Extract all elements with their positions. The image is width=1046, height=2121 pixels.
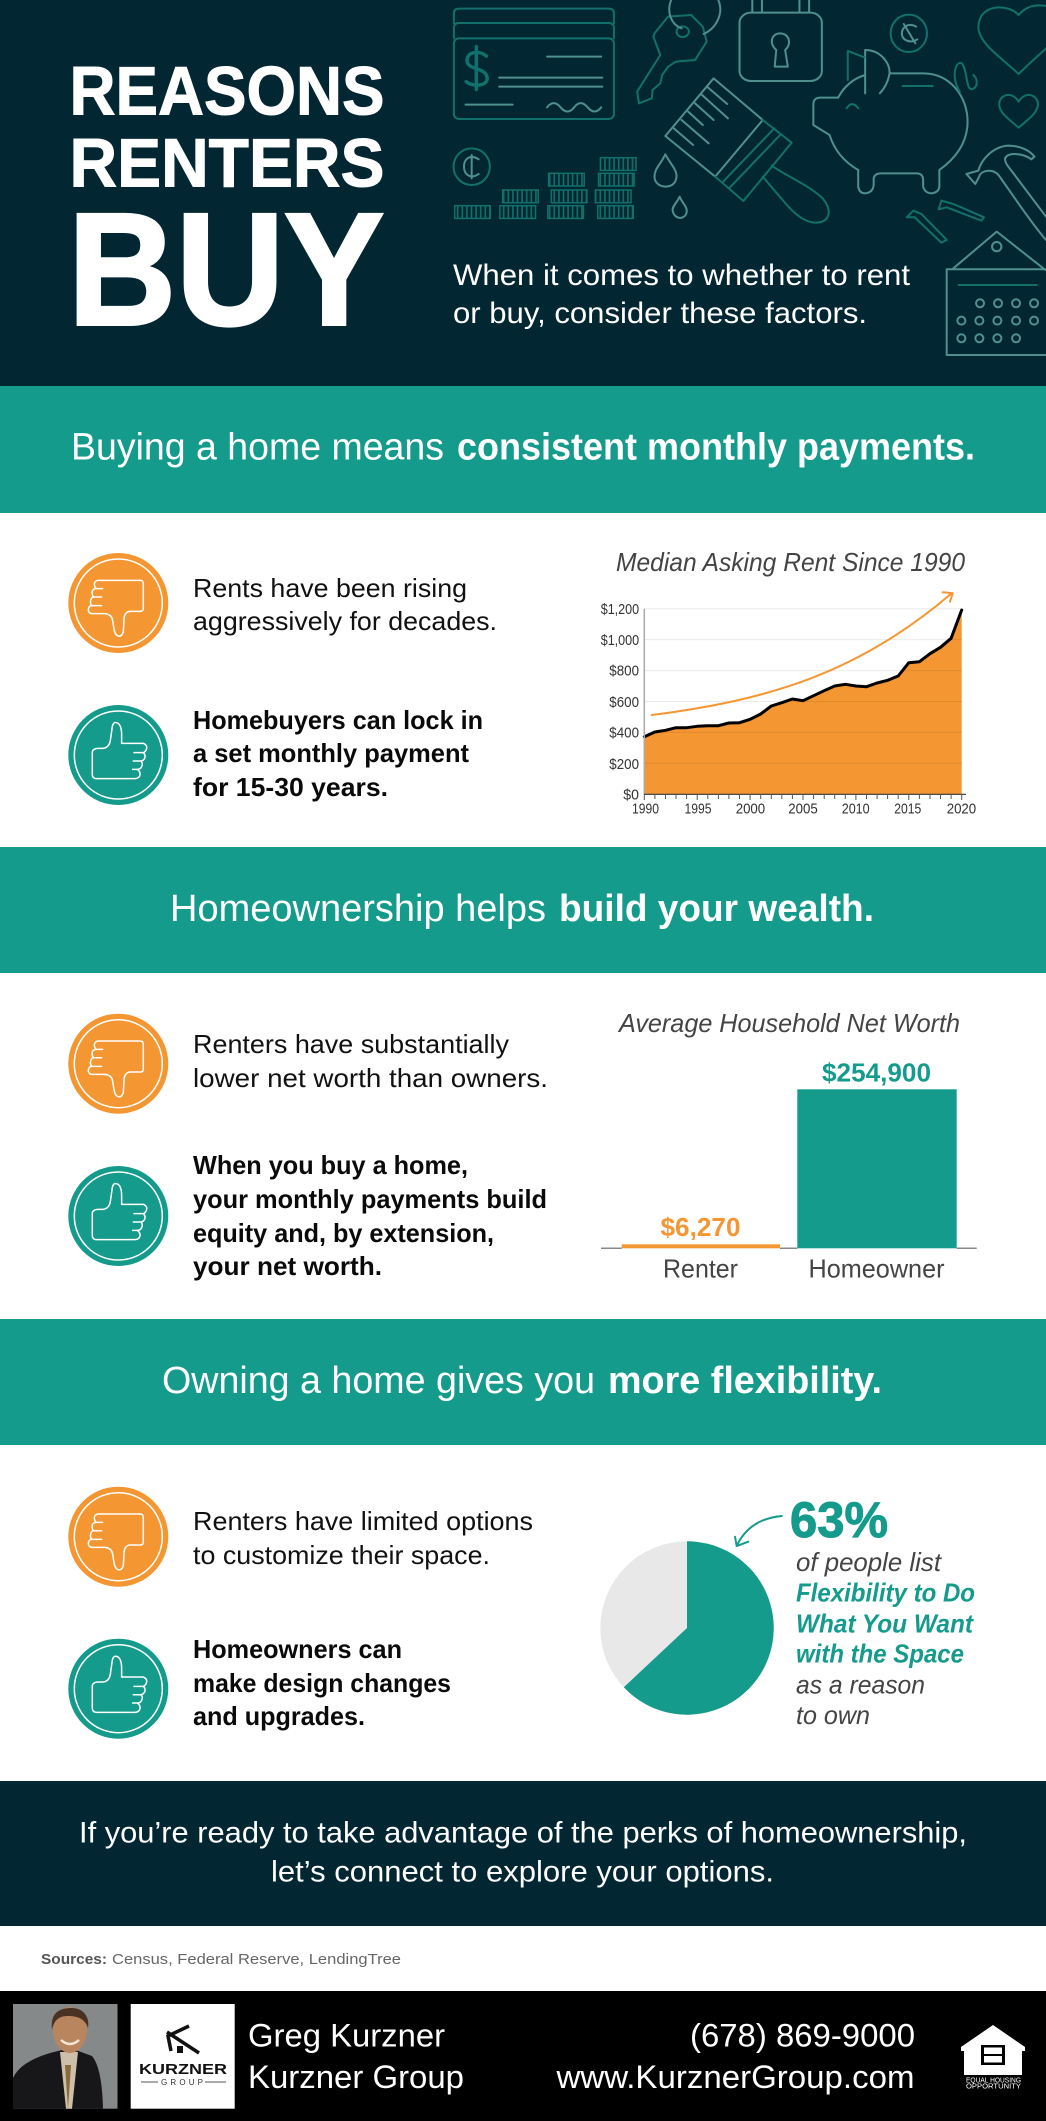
agent contact: (678) 869-9000 (690, 2018, 915, 2054)
icon: key (637, 0, 720, 103)
icon: equal housing opportunity (961, 2025, 1025, 2090)
x axis labels: 2005 (788, 800, 818, 818)
panel: call to action (0, 1781, 1046, 1926)
x axis labels: 2010 (842, 800, 870, 818)
x axis labels: 2020 (947, 800, 976, 818)
text: payments build equity: equity and, by extension, (193, 1218, 494, 1248)
title: REASONS (70, 52, 384, 130)
y axis labels (601, 601, 639, 804)
text: renters limited options: Renters have limited options (193, 1506, 533, 1536)
icon: calendar house (947, 232, 1045, 355)
icon: thumbs down 2 (68, 1014, 168, 1114)
arrow: rising rent trend (652, 592, 953, 715)
text: renters limited options (193, 1506, 533, 1570)
icon: thumbs down 1 (68, 553, 168, 653)
text: renters lower net worth: lower net worth than owners. (193, 1063, 548, 1093)
icon: thumbs up 3 (68, 1639, 168, 1739)
bar chart: net worth: Renter (663, 1253, 738, 1283)
text: renters lower net worth (193, 1029, 548, 1093)
icon: thumbs down 3 (68, 1487, 168, 1587)
company logo (131, 2004, 235, 2109)
callout: 63 percent stat: What You Want (796, 1608, 974, 1638)
agent contact (555, 2018, 915, 2095)
y axis labels: $1,000 (601, 632, 639, 649)
area chart: median asking rent (601, 592, 976, 818)
header line illustrations (454, 0, 1046, 355)
text: rents rising: aggressively for decades. (193, 606, 497, 636)
text: homebuyers lock in: for 15-30 years. (193, 772, 388, 802)
text: homeowners design changes: make design changes (193, 1668, 451, 1698)
sources: Census, Federal Reserve, LendingTree (112, 1951, 401, 1968)
chart title: household net worth: Average Household Net Worth (617, 1008, 960, 1038)
text: homebuyers lock in: a set monthly payment (193, 738, 469, 768)
x axis labels: 2015 (894, 800, 921, 818)
panel: agent footer (0, 1991, 1046, 2121)
panel: call to action: If you’re ready to take advantage of the perks of homeownership, (79, 1817, 967, 1850)
x axis labels: 1990 (632, 800, 659, 818)
callout: 63 percent stat: as a reason (796, 1669, 925, 1699)
icon: paint brush (665, 78, 829, 223)
icon: nails (907, 201, 984, 243)
text: homeowners design changes: Homeowners can (193, 1634, 402, 1664)
y axis labels: $200 (609, 756, 639, 773)
arrow: callout to pie (735, 1516, 782, 1546)
icon: cent coin (454, 148, 490, 185)
company logo: KURZNER (139, 2061, 227, 2078)
icon: paint drops (655, 154, 687, 218)
x axis labels: 1995 (684, 800, 712, 818)
icon: thumbs up 1 (68, 705, 168, 805)
panel: more flexibility heading (0, 1319, 1046, 1445)
callout: 63 percent stat: with the Space (796, 1639, 964, 1669)
company logo: GROUP (161, 2078, 203, 2087)
callout: 63 percent stat: to own (796, 1700, 870, 1730)
text: rents rising: Rents have been rising (193, 573, 467, 603)
panel: build your wealth heading: Homeownership helps (170, 888, 546, 930)
y axis labels: $400 (609, 725, 639, 742)
bar chart: net worth: $254,900 (822, 1058, 931, 1088)
pie chart: 63 percent (600, 1541, 774, 1715)
text: homebuyers lock in (193, 705, 483, 802)
bar chart: net worth (601, 1058, 977, 1283)
title: RENTERS (70, 124, 384, 202)
y axis labels: $800 (609, 663, 639, 680)
text: homebuyers lock in: Homebuyers can lock in (193, 705, 483, 735)
text: homeowners design changes: and upgrades. (193, 1701, 365, 1731)
agent name (248, 2018, 464, 2095)
panel: consistent monthly payments heading (0, 386, 1046, 513)
icon: hammer (966, 146, 1046, 240)
y axis labels: $600 (609, 694, 639, 711)
chart title: median asking rent: Median Asking Rent Since 1990 (616, 547, 966, 577)
text: rents rising (193, 573, 497, 636)
text: payments build equity (193, 1150, 547, 1281)
title (68, 52, 384, 358)
bar chart: net worth: Homeowner (808, 1253, 945, 1283)
agent photo (13, 2004, 118, 2109)
panel: build your wealth heading (0, 847, 1046, 973)
text: payments build equity: your monthly payments build (193, 1184, 547, 1214)
icon: thumbs up 2 (68, 1166, 168, 1266)
agent name: Greg Kurzner (248, 2018, 445, 2054)
icon: hearts (978, 5, 1046, 128)
panel: header (0, 0, 1046, 386)
panel: consistent monthly payments heading: consistent monthly payments. (457, 426, 975, 468)
header intro text: When it comes to whether to rent (453, 259, 911, 292)
panel: more flexibility heading: more flexibility. (608, 1360, 882, 1402)
callout: 63 percent stat: Flexibility to Do (796, 1578, 975, 1608)
icon: equal housing opportunity: EQUAL HOUSING (966, 2076, 1021, 2084)
icon: bank check (454, 9, 614, 119)
icon: small coin (891, 15, 927, 52)
icon: piggy bank (813, 50, 977, 193)
panel: more flexibility heading: Owning a home gives you (162, 1360, 595, 1402)
text: payments build equity: When you buy a home, (193, 1150, 468, 1180)
panel: consistent monthly payments heading: Buying a home means (71, 426, 444, 468)
y axis labels: $1,200 (601, 601, 639, 618)
agent contact: www.KurznerGroup.com (555, 2059, 914, 2095)
x axis labels (632, 800, 976, 818)
title: BUY (68, 180, 384, 358)
panel: build your wealth heading: build your wealth. (559, 888, 874, 930)
agent name: Kurzner Group (248, 2059, 464, 2095)
icon: coin stacks (455, 158, 636, 218)
text: renters limited options: to customize their space. (193, 1540, 490, 1570)
callout: 63 percent stat: of people list (796, 1547, 943, 1577)
x axis labels: 2000 (736, 800, 765, 818)
text: renters lower net worth: Renters have substantially (193, 1029, 509, 1059)
header intro text (453, 259, 911, 330)
bar chart: net worth: $6,270 (660, 1212, 740, 1242)
y axis labels: $0 (623, 787, 639, 804)
callout: 63 percent stat: 63% (790, 1492, 888, 1548)
callout: 63 percent stat (790, 1492, 975, 1730)
icon: equal housing opportunity: OPPORTUNITY (966, 2082, 1021, 2090)
icon: padlock (740, 0, 822, 81)
text: homeowners design changes (193, 1634, 451, 1731)
sources: Sources: (41, 1951, 107, 1968)
text: payments build equity: your net worth. (193, 1251, 382, 1281)
header intro text: or buy, consider these factors. (453, 297, 867, 330)
panel: call to action: let’s connect to explore your options. (271, 1856, 774, 1889)
